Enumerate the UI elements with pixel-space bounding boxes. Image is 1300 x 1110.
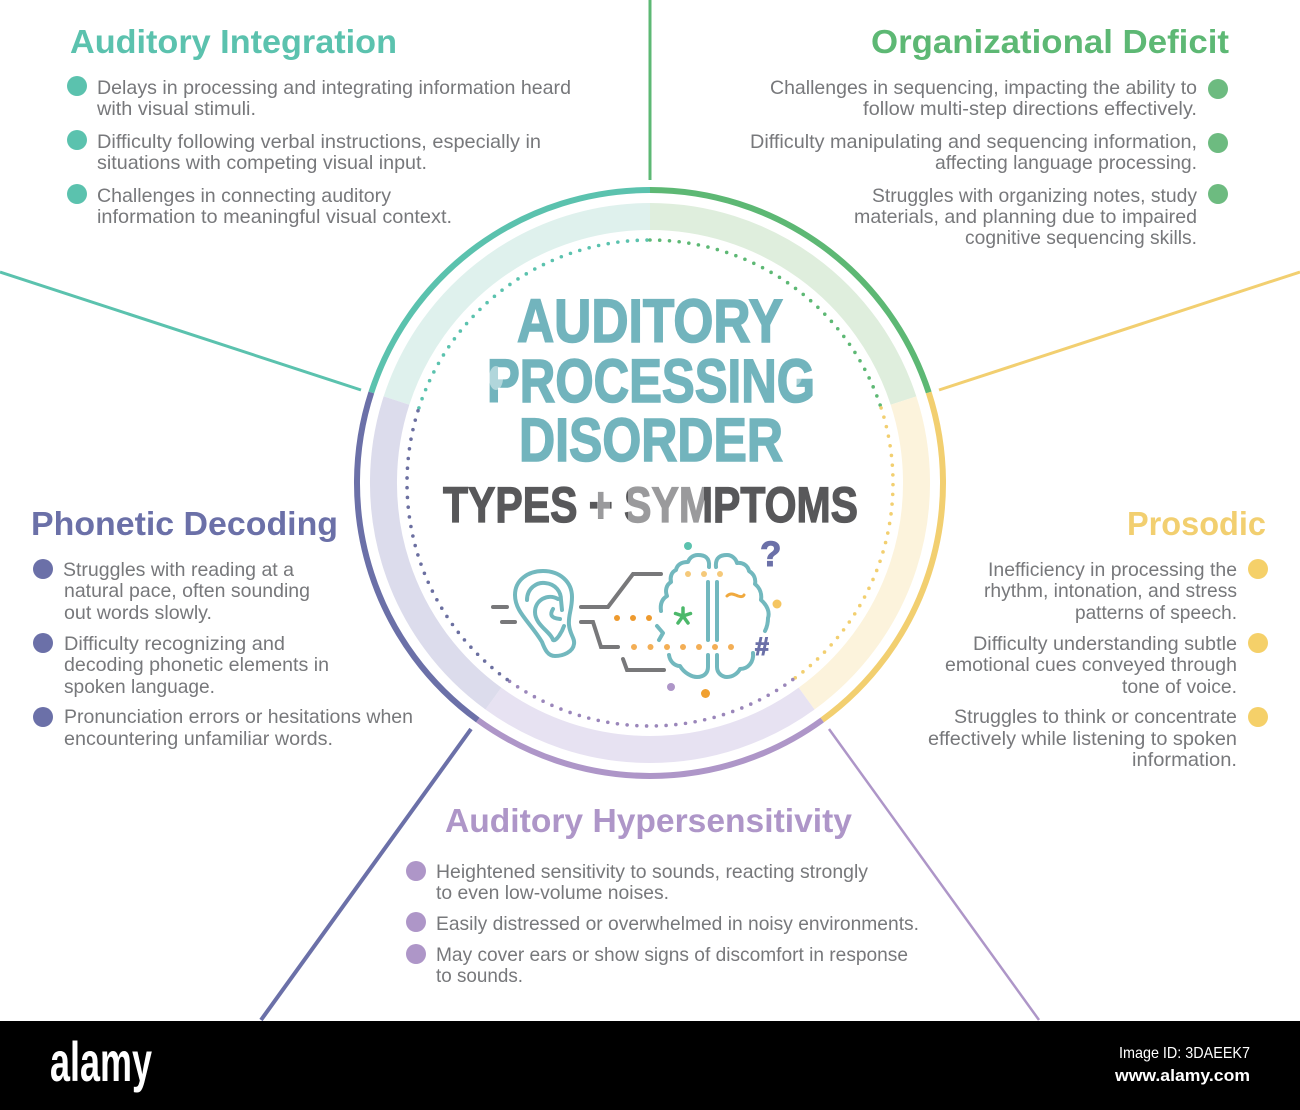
body text: effectively while listening to spoken	[928, 728, 1237, 750]
body text: decoding phonetic elements in	[64, 654, 329, 676]
body text: cognitive sequencing skills.	[965, 227, 1197, 249]
subtitle: TYPES + SYMPTOMS	[443, 477, 858, 533]
icon: tilde	[727, 594, 744, 597]
icon: ear and brain	[493, 535, 782, 698]
body text: to even low-volume noises.	[436, 882, 669, 904]
panel: phonetic decoding	[31, 505, 413, 750]
body text	[63, 559, 413, 750]
footer url: www.alamy.com	[1114, 1066, 1250, 1085]
body text: Struggles with reading at a	[63, 559, 294, 581]
heading: Prosodic	[1127, 505, 1266, 542]
bullets	[67, 76, 87, 204]
icon: question mark: ?	[760, 535, 781, 574]
body text	[750, 77, 1197, 249]
accent dots	[667, 542, 782, 698]
orange dots	[614, 615, 652, 621]
main title: AUDITORY	[517, 287, 783, 355]
icon: green star	[676, 608, 690, 623]
heading: Phonetic Decoding	[31, 505, 338, 542]
panel: organizational deficit	[750, 23, 1229, 249]
icon: ear	[515, 571, 574, 656]
body text: spoken language.	[64, 676, 215, 698]
body text: Difficulty manipulating and sequencing information,	[750, 131, 1197, 153]
body text: affecting language processing.	[935, 152, 1197, 174]
main title: PROCESSING	[487, 347, 815, 415]
body text: situations with competing visual input.	[97, 152, 427, 174]
bullets	[33, 559, 53, 727]
body text: May cover ears or show signs of discomfort in response	[436, 944, 908, 966]
heading: Auditory Hypersensitivity	[445, 802, 853, 839]
body text	[436, 861, 919, 987]
pale ring segments	[383, 216, 917, 749]
signal lines	[493, 574, 664, 670]
panel: auditory hypersensitivity	[406, 802, 919, 987]
body text: Pronunciation errors or hesitations when	[64, 706, 413, 728]
dotted inner circle	[407, 240, 893, 726]
body text: to sounds.	[436, 965, 523, 987]
body text	[96, 77, 571, 228]
body text: rhythm, intonation, and stress	[984, 580, 1237, 602]
body text: follow multi-step directions effectively.	[863, 98, 1197, 120]
main title	[487, 287, 815, 474]
body text: Difficulty recognizing and	[64, 633, 285, 655]
footer bar	[0, 1021, 1300, 1110]
panel: prosodic	[928, 505, 1268, 771]
body text: information to meaningful visual context.	[97, 206, 452, 228]
heading: Auditory Integration	[70, 23, 397, 60]
heading: Organizational Deficit	[871, 23, 1229, 60]
body text: emotional cues conveyed through	[945, 654, 1237, 676]
light orange dots	[631, 644, 734, 650]
body text: out words slowly.	[64, 602, 212, 624]
body text: tone of voice.	[1122, 676, 1237, 698]
icon: brain	[657, 555, 769, 677]
body text: with visual stimuli.	[96, 98, 256, 120]
body text: Challenges in connecting auditory	[97, 185, 391, 207]
footer logo: alamy	[50, 1030, 152, 1093]
body text: encountering unfamiliar words.	[64, 728, 333, 750]
body text: Difficulty following verbal instructions, especially in	[97, 131, 541, 153]
central ring diagram	[357, 190, 943, 776]
icon: hash: #	[755, 633, 769, 661]
body text: Challenges in sequencing, impacting the ability to	[770, 77, 1197, 99]
body text	[928, 559, 1237, 771]
main title: DISORDER	[519, 406, 783, 474]
bullets	[406, 861, 426, 964]
body text: materials, and planning due to impaired	[854, 206, 1197, 228]
footer image id: Image ID: 3DAEEK7	[1119, 1045, 1250, 1062]
body text: natural pace, often sounding	[64, 580, 310, 602]
body text: Easily distressed or overwhelmed in noisy environments.	[436, 913, 919, 935]
bullets	[1248, 559, 1268, 727]
outer coloured arcs	[357, 190, 943, 776]
body text: Inefficiency in processing the	[988, 559, 1237, 581]
bullets	[1208, 79, 1228, 204]
body text: Delays in processing and integrating information heard	[97, 77, 571, 99]
body text: Heightened sensitivity to sounds, reacting strongly	[436, 861, 868, 883]
body text: Struggles to think or concentrate	[954, 706, 1237, 728]
body text: patterns of speech.	[1075, 602, 1237, 624]
body text: Struggles with organizing notes, study	[872, 185, 1197, 207]
body text: information.	[1132, 749, 1237, 771]
panel: auditory integration	[67, 23, 571, 228]
body text: Difficulty understanding subtle	[973, 633, 1237, 655]
yellow dots	[685, 571, 723, 577]
